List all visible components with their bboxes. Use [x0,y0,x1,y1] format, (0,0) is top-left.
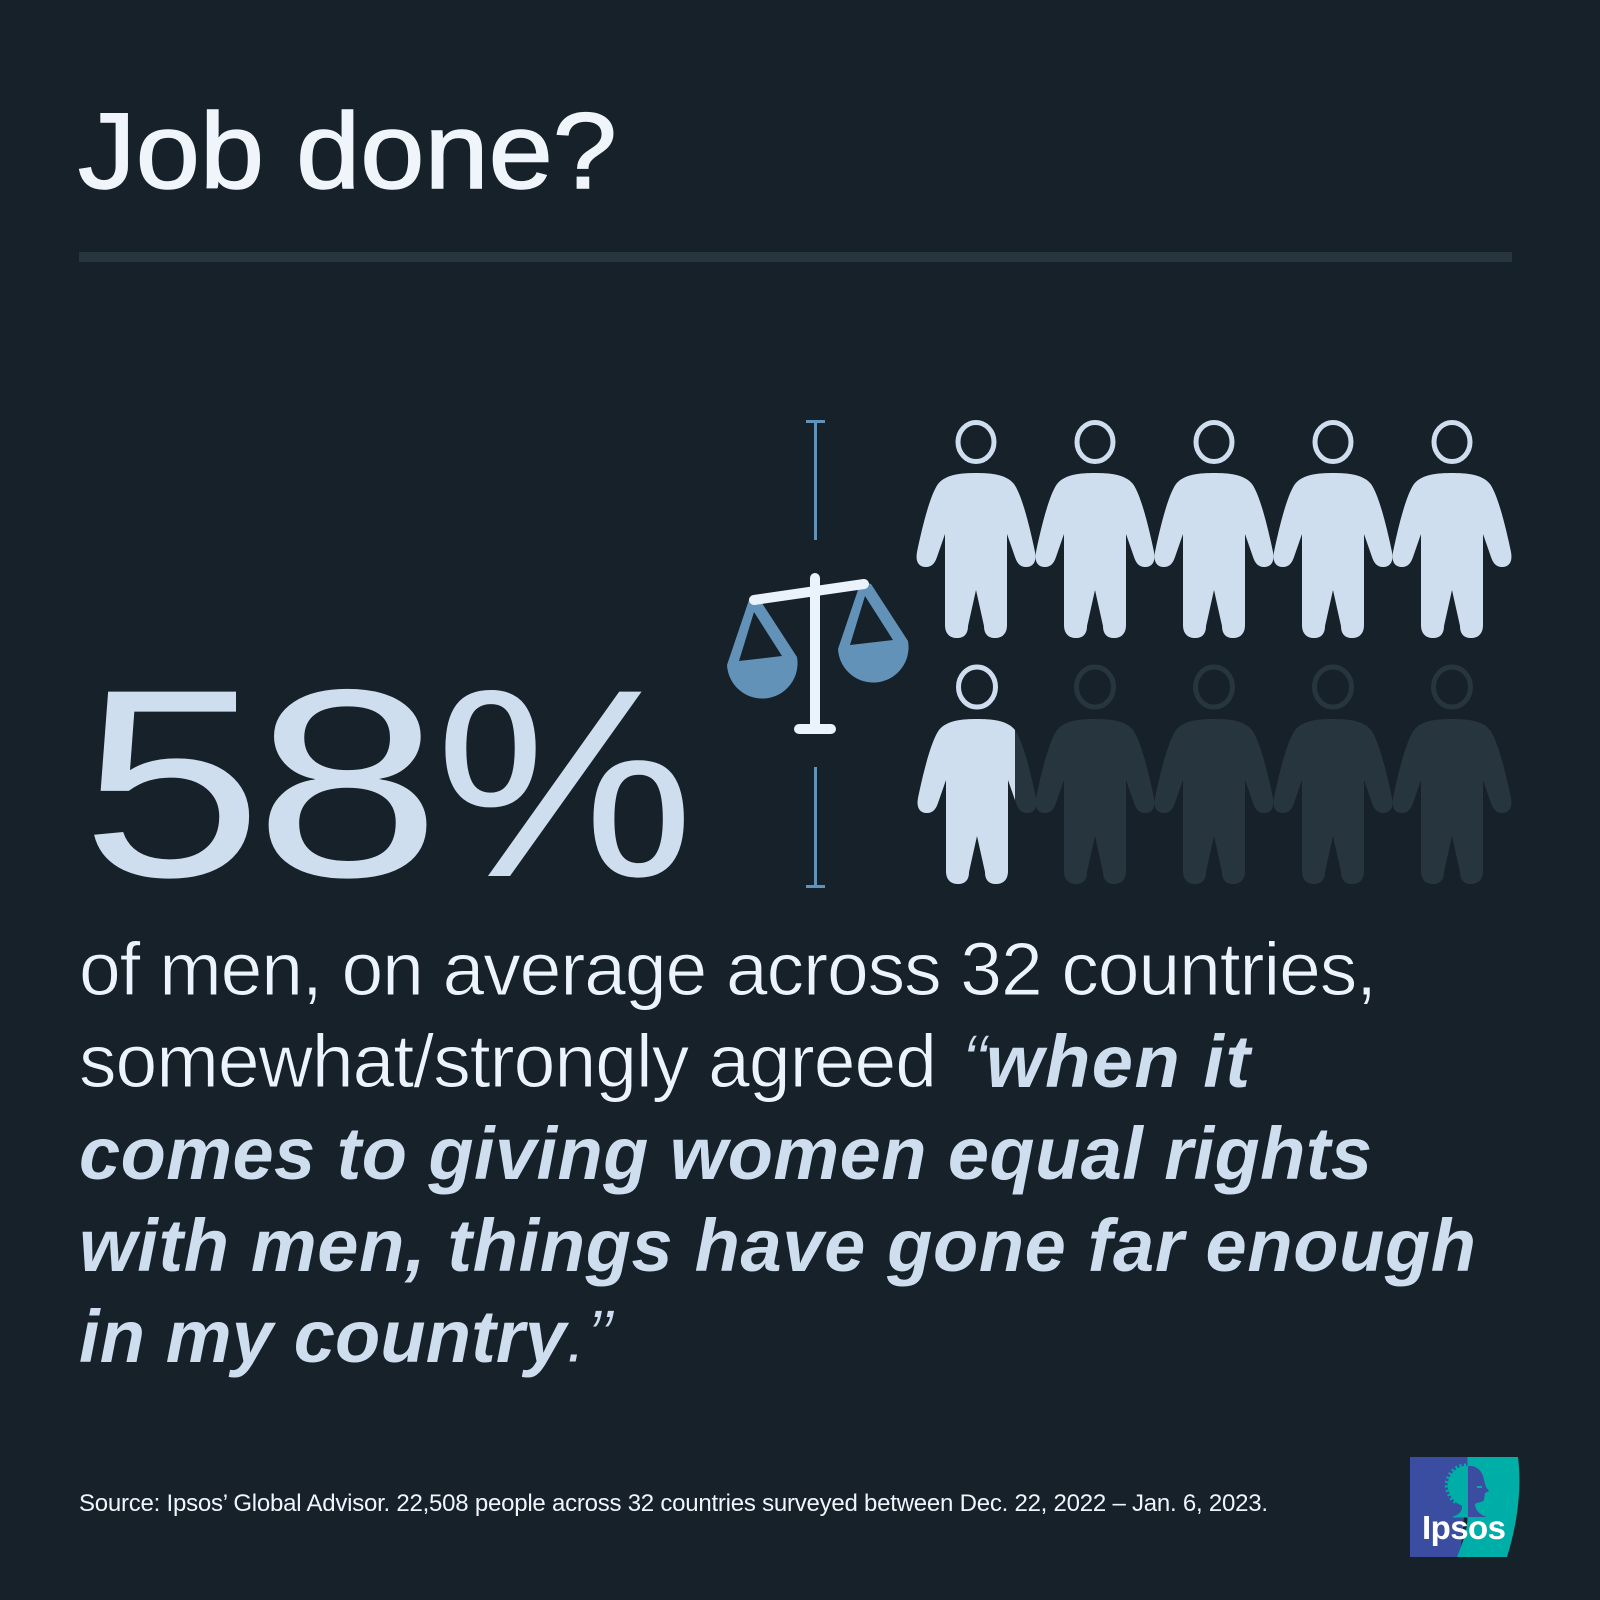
bracket top [806,422,825,540]
big statistic: % [435,634,694,933]
pictogram: ten people [917,422,1511,884]
bracket bottom [806,767,825,886]
quote line 4: with men, things have gone far enough [79,1204,1476,1287]
person row 2, dark [918,667,1511,884]
left pan [727,597,798,699]
logo head [1468,1466,1489,1517]
line 2: somewhat/strongly agreed [79,1019,937,1103]
big statistic [81,634,694,933]
quote line 2: when it [986,1020,1253,1103]
logo tree edge speckle [1446,1465,1466,1503]
big statistic: 8 [254,635,441,933]
logo tree [1448,1466,1468,1517]
quote open: “ [962,1019,991,1103]
source: Source: Ipsos’ Global Advisor. 22,508 people across 32 countries surveyed between Dec. 22, 2022 – Jan. 6, 2023. [79,1490,1268,1517]
quote line 3: comes to giving women equal rights [79,1112,1372,1195]
logo eye [1477,1486,1482,1488]
person row 2, highlighted fraction [918,664,1015,884]
quote close: .” [566,1294,615,1378]
line 1: of men, on average across 32 countries, [79,927,1377,1011]
icon: balance scale with brackets [727,422,909,886]
big statistic: 5 [81,634,263,933]
person row 1 [917,422,1511,638]
title: Job done? [78,90,617,211]
scale post and beam [754,578,864,729]
right pan [838,581,909,683]
quote line 5: in my country [79,1295,570,1378]
statement text [79,927,1476,1378]
logo: Ipsos [1410,1457,1519,1557]
logo wordmark: Ipsos [1422,1509,1506,1546]
